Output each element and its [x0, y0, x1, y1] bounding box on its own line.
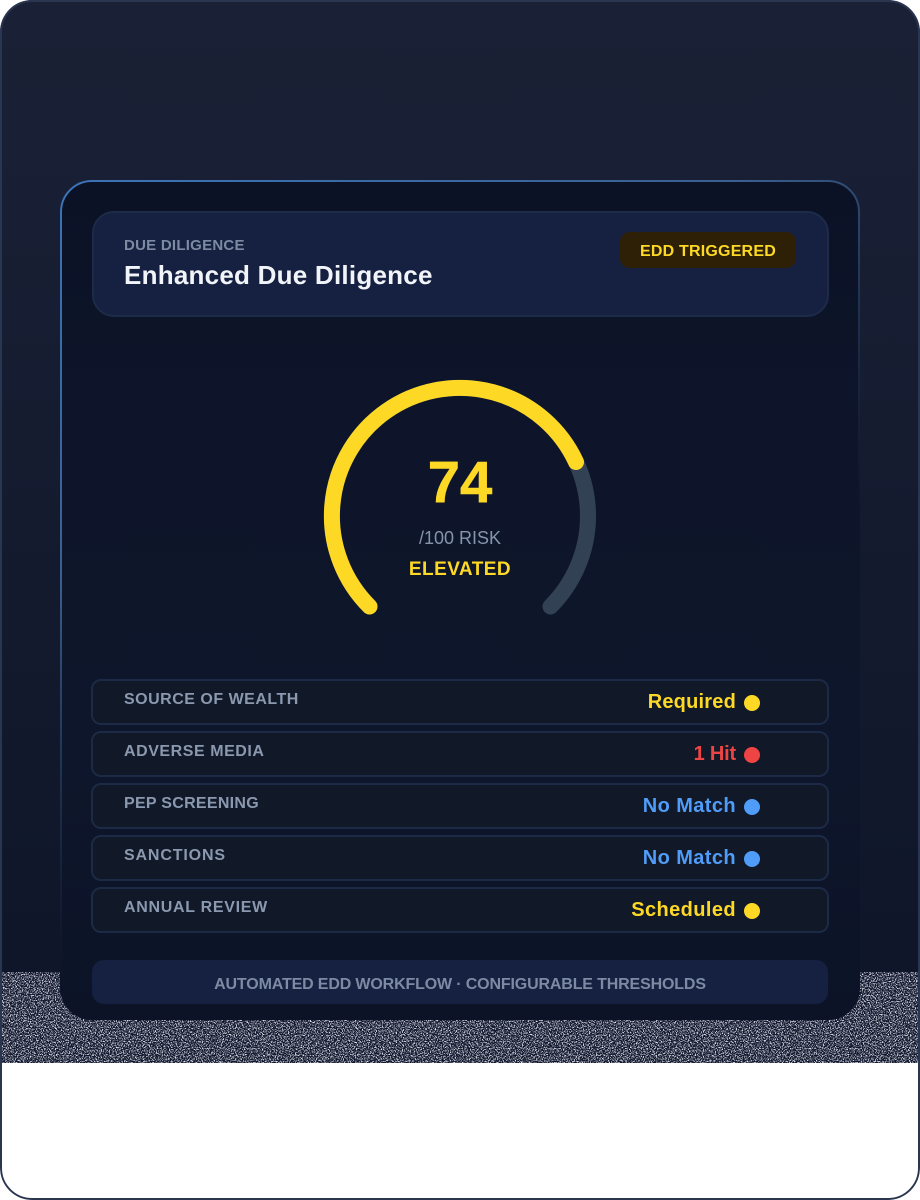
value: No Match: [643, 795, 736, 817]
row: source of wealth: [91, 679, 829, 725]
risk level: ELEVATED: [409, 559, 511, 580]
label: PEP SCREENING: [124, 795, 259, 812]
score: 74: [428, 450, 492, 515]
label: SANCTIONS: [124, 847, 226, 864]
panel: header: [92, 211, 829, 317]
label: ANNUAL REVIEW: [124, 899, 268, 916]
panel: main card: [60, 180, 860, 1020]
badge: EDD triggered: [620, 232, 796, 268]
gauge track: [332, 388, 588, 606]
value: Scheduled: [631, 899, 736, 921]
score unit: /100 RISK: [419, 528, 501, 548]
gauge value arc: [332, 388, 576, 606]
value: No Match: [643, 847, 736, 869]
row: adverse media: [91, 731, 829, 777]
value: 1 Hit: [694, 743, 736, 765]
status dot: [744, 695, 760, 711]
footer text: AUTOMATED EDD WORKFLOW · CONFIGURABLE THRESHOLDS: [214, 976, 706, 993]
value: Required: [648, 691, 736, 713]
row: sanctions: [91, 835, 829, 881]
status dot: [744, 851, 760, 867]
status dot: [744, 747, 760, 763]
title: Enhanced Due Diligence: [124, 260, 433, 290]
badge text: EDD TRIGGERED: [640, 243, 776, 260]
footer bar: [92, 960, 828, 1004]
label: SOURCE OF WEALTH: [124, 691, 299, 708]
row: PEP screening: [91, 783, 829, 829]
label: ADVERSE MEDIA: [124, 743, 265, 760]
status dot: [744, 903, 760, 919]
gauge chart: [324, 380, 596, 614]
eyebrow label: DUE DILIGENCE: [124, 236, 245, 254]
status dot: [744, 799, 760, 815]
row: annual review: [91, 887, 829, 933]
